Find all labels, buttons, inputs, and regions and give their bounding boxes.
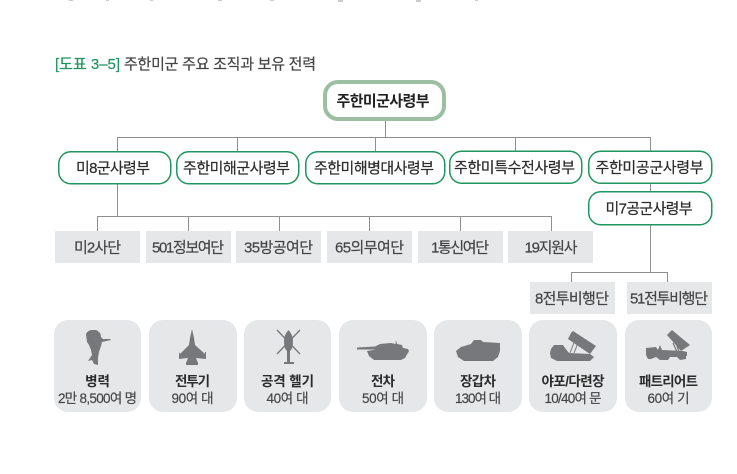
card: tanks — [339, 320, 427, 412]
unit: 65th Medical Brigade: 65의무여단 — [335, 240, 404, 256]
card: fighters: 90여 대 — [172, 391, 214, 406]
unit: 2nd Infantry Division: 미2사단 — [74, 240, 121, 256]
command: Navy — [177, 152, 299, 184]
card: armored vehicles: 130여 대 — [455, 391, 501, 406]
card: fighters: 전투기 — [175, 374, 210, 389]
card: Patriot — [625, 320, 712, 412]
unit: 8th Fighter Wing — [530, 282, 615, 314]
card: tanks: 전차 — [371, 374, 396, 389]
command: Eighth Army — [59, 152, 171, 184]
command: Eighth Army: 미8군사령부 — [76, 160, 150, 177]
card: attack helicopters: 40여 대 — [266, 391, 308, 406]
icon: fighter jet — [179, 329, 206, 365]
top command box — [325, 82, 444, 119]
top command box: 주한미군사령부 — [336, 93, 430, 110]
command: Marines: 주한미해병대사령부 — [314, 160, 434, 177]
card: artillery and rocket launchers — [529, 320, 617, 412]
card: fighters — [149, 320, 237, 412]
card: Patriot: 패트리어트 — [639, 374, 698, 389]
command: Special Operations: 주한미특수전사령부 — [454, 160, 575, 176]
unit: 35th Air Defense Brigade: 35방공여단 — [244, 240, 313, 256]
unit: 51st Fighter Wing: 51전투비행단 — [630, 290, 708, 308]
card: artillery and rocket launchers: 10/40여 문 — [544, 391, 602, 406]
connector lines — [98, 121, 668, 282]
card: armored vehicles — [434, 320, 522, 412]
unit: 501st Intelligence Brigade: 501정보여단 — [152, 240, 224, 256]
title: [도표 3–5] — [55, 56, 120, 73]
unit: 501st Intelligence Brigade — [146, 231, 231, 263]
unit: 19th Sustainment Command — [508, 231, 593, 263]
command: Air Force — [589, 151, 712, 183]
icon: tank — [357, 340, 409, 360]
command: Air Force: 주한미공군사령부 — [596, 160, 704, 176]
icon: Patriot launcher — [646, 330, 690, 360]
card: artillery and rocket launchers: 야포/다련장 — [542, 374, 605, 389]
command: Special Operations — [450, 151, 582, 183]
card: troops: 병력 — [85, 374, 110, 389]
command: Seventh Air Force — [589, 192, 712, 225]
card: attack helicopters — [244, 320, 331, 412]
card: troops: 2만 8,500여 명 — [58, 391, 137, 406]
icon: armored vehicle — [456, 340, 500, 361]
command: Marines — [306, 152, 445, 184]
card: Patriot: 60여 기 — [648, 391, 690, 406]
unit: 51st Fighter Wing — [627, 282, 712, 314]
unit: 65th Medical Brigade — [327, 231, 412, 263]
unit: 35th Air Defense Brigade — [236, 231, 321, 263]
card: tanks: 50여 대 — [362, 391, 404, 406]
card: armored vehicles: 장갑차 — [460, 374, 497, 389]
unit: 1st Signal Brigade — [418, 231, 503, 263]
card: troops — [54, 320, 141, 412]
card: attack helicopters: 공격 헬기 — [261, 374, 314, 389]
command: Seventh Air Force: 미7공군사령부 — [606, 200, 693, 218]
icon: soldier — [86, 330, 111, 365]
icon: helicopter — [277, 330, 300, 364]
unit: 8th Fighter Wing: 8전투비행단 — [535, 290, 609, 308]
title: 주한미군 주요 조직과 보유 전력 — [124, 56, 316, 73]
unit: 2nd Infantry Division — [55, 231, 140, 263]
unit: 1st Signal Brigade: 1통신여단 — [431, 240, 489, 256]
command: Navy: 주한미해군사령부 — [183, 160, 290, 177]
icon: rocket launcher — [550, 331, 596, 361]
unit: 19th Sustainment Command: 19지원사 — [524, 240, 578, 256]
